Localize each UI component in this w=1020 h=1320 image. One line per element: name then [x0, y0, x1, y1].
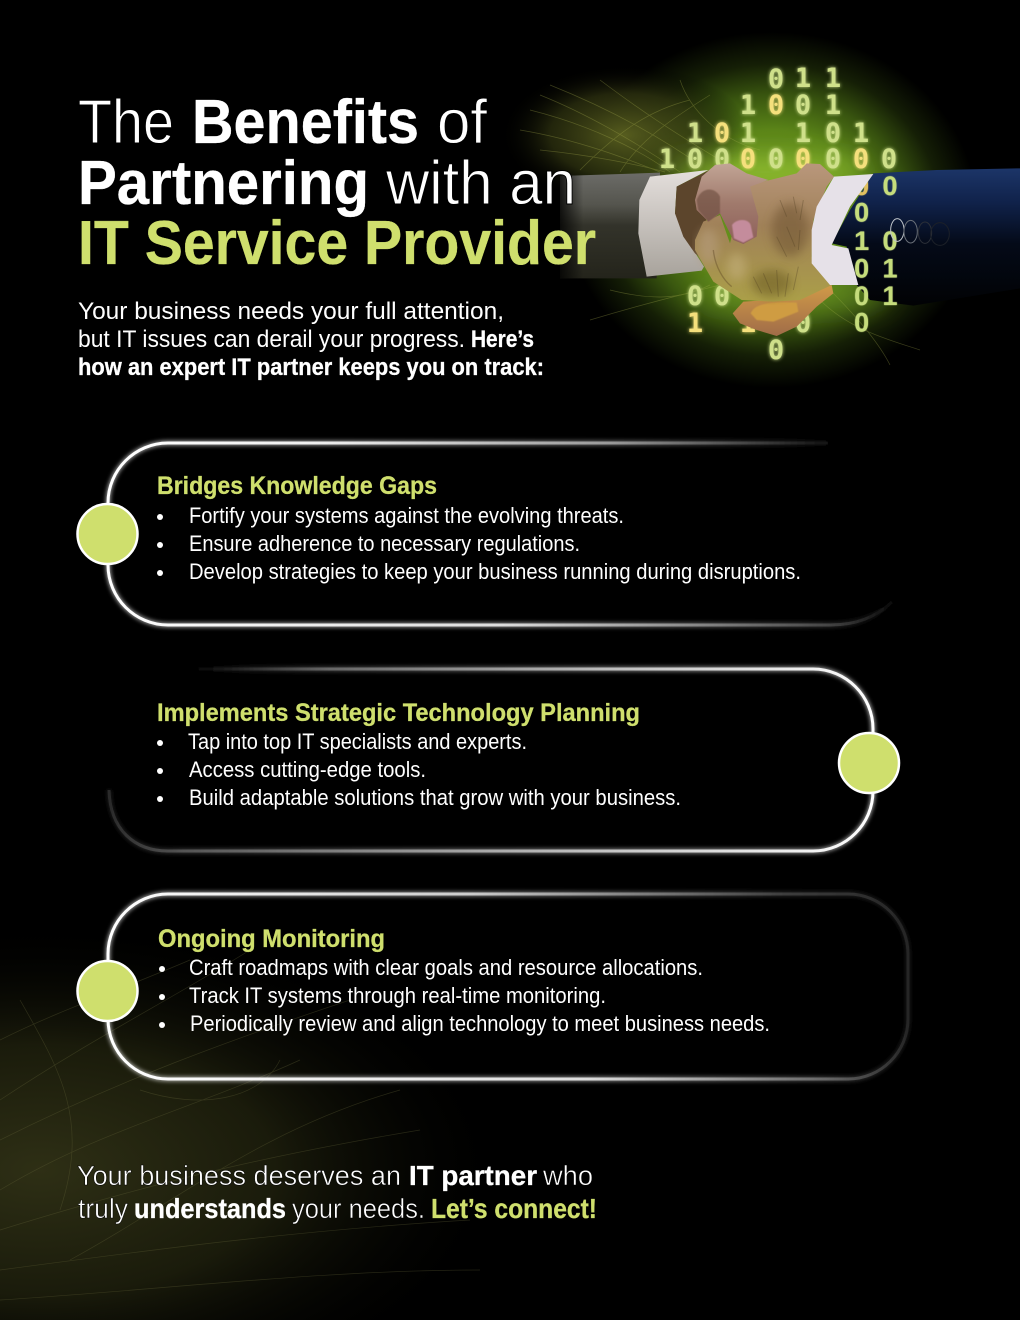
binary digits: 1: [659, 144, 675, 175]
sleeve buttons: [891, 219, 949, 245]
closing call to action: [77, 1160, 597, 1224]
title: IT Service Provider: [78, 209, 596, 278]
binary digits: 0: [768, 335, 784, 366]
bullet list: Track IT systems through real-time monitoring.: [189, 983, 606, 1008]
digits over right sleeve: 0: [854, 281, 869, 311]
intro text: how an expert IT partner keeps you on track:: [78, 354, 544, 381]
digits over right sleeve: 0: [854, 253, 869, 283]
digits over right sleeve: 0: [882, 171, 898, 201]
left sleeve: [560, 173, 660, 278]
intro text: Your business needs your full attention,: [78, 298, 504, 325]
intro text: [78, 298, 544, 381]
binary digits: 1: [795, 63, 811, 94]
bullet list: [157, 503, 801, 584]
digits over right sleeve: 0: [854, 198, 869, 228]
background: upper light streaks: [500, 65, 920, 365]
background: lower-left light streaks: [0, 920, 510, 1320]
title: [78, 88, 596, 278]
closing call to action: truly: [78, 1193, 128, 1224]
binary digits: [659, 63, 897, 366]
bullet list: Develop strategies to keep your business running during disruptions.: [189, 559, 801, 584]
bullet list: [157, 729, 681, 810]
back of right hand: [695, 163, 834, 302]
heading: Bridges Knowledge Gaps: [157, 472, 437, 500]
right sleeve: [832, 168, 1020, 306]
closing call to action: your needs.: [292, 1193, 425, 1224]
palm of left hand: [675, 171, 708, 260]
title: of: [437, 88, 488, 157]
light bloom around hands: [665, 158, 890, 311]
binary digits: 1: [740, 118, 756, 149]
bullet list: Build adaptable solutions that grow with your business.: [189, 785, 681, 810]
closing call to action: understands: [134, 1193, 286, 1224]
binary digits: 0: [714, 118, 730, 149]
closing call to action: who: [542, 1160, 593, 1191]
bullet list: Periodically review and align technology to meet business needs.: [190, 1011, 770, 1036]
bullet list: Access cutting-edge tools.: [189, 757, 426, 782]
panel: ongoing monitoring: [78, 894, 908, 1079]
digits over right sleeve: [854, 171, 898, 338]
node circle: [78, 504, 138, 564]
title: with an: [385, 149, 576, 218]
digits over right sleeve: 0: [854, 308, 869, 338]
binary digits: 0: [740, 144, 756, 175]
binary digits: 0: [853, 144, 869, 175]
binary digits: 1: [825, 63, 841, 94]
panel: implements strategic technology planning: [109, 669, 899, 851]
closing call to action: Your business deserves an: [77, 1160, 401, 1191]
binary digits: 0: [768, 90, 784, 121]
title: Benefits: [192, 88, 419, 157]
binary digits: 1: [853, 118, 869, 149]
title: Partnering: [78, 149, 369, 218]
digits over right sleeve: 1: [854, 226, 869, 256]
hand shading and hair: [698, 197, 808, 297]
binary digits: 0: [714, 144, 730, 175]
digits over right sleeve: 1: [882, 253, 898, 283]
binary digits: 0: [768, 144, 784, 175]
illustration: handshake: [638, 163, 873, 336]
binary digits: 0: [714, 281, 730, 312]
bullet list: Tap into top IT specialists and experts.: [188, 729, 527, 754]
binary digits: 0: [825, 118, 841, 149]
background: green glow behind handshake: [567, 32, 977, 388]
heading: Ongoing Monitoring: [158, 925, 385, 953]
bullet list: [159, 955, 770, 1036]
digits over right sleeve: 0: [882, 226, 898, 256]
binary digits: 0: [687, 281, 703, 312]
bullet list: Ensure adherence to necessary regulations.: [189, 531, 580, 556]
thumb: [695, 163, 768, 244]
intro text: Here’s: [471, 326, 534, 353]
illustration: sleeves: [560, 168, 1020, 338]
panel outline: [108, 443, 892, 625]
left shirt cuff: [638, 170, 708, 277]
binary digits: 1: [687, 308, 703, 339]
node circle: [78, 961, 138, 1021]
binary digits: 1: [740, 308, 756, 339]
binary digits: 0: [881, 144, 897, 175]
bullet list: Craft roadmaps with clear goals and resource allocations.: [189, 955, 703, 980]
binary digits: 1: [795, 118, 811, 149]
intro text: but IT issues can derail your progress.: [78, 326, 465, 353]
binary digits: 1: [825, 90, 841, 121]
binary digits: 0: [795, 90, 811, 121]
heading: Implements Strategic Technology Planning: [157, 699, 640, 727]
closing call to action: Let’s connect!: [431, 1193, 597, 1224]
closing call to action: IT partner: [409, 1160, 537, 1191]
binary digits: 0: [795, 144, 811, 175]
digits over right sleeve: 0: [854, 171, 869, 201]
binary digits: 0: [795, 308, 811, 339]
bullet list: Fortify your systems against the evolving threats.: [189, 503, 624, 528]
right shirt cuff: [812, 174, 873, 285]
thumbnail: [732, 220, 753, 243]
binary digits: 1: [687, 118, 703, 149]
binary digits: 0: [825, 144, 841, 175]
panel outline: [109, 669, 873, 851]
thumb shadow: [697, 190, 720, 222]
lower fingers: [733, 285, 833, 336]
node circle: [839, 733, 899, 793]
binary digits: 1: [740, 90, 756, 121]
binary digits: 0: [768, 64, 784, 95]
binary digits: 0: [687, 144, 703, 175]
title: The: [78, 88, 174, 157]
digits over right sleeve: 1: [882, 281, 898, 311]
panel: bridges knowledge gaps: [78, 443, 892, 625]
panel outline: [108, 894, 908, 1079]
